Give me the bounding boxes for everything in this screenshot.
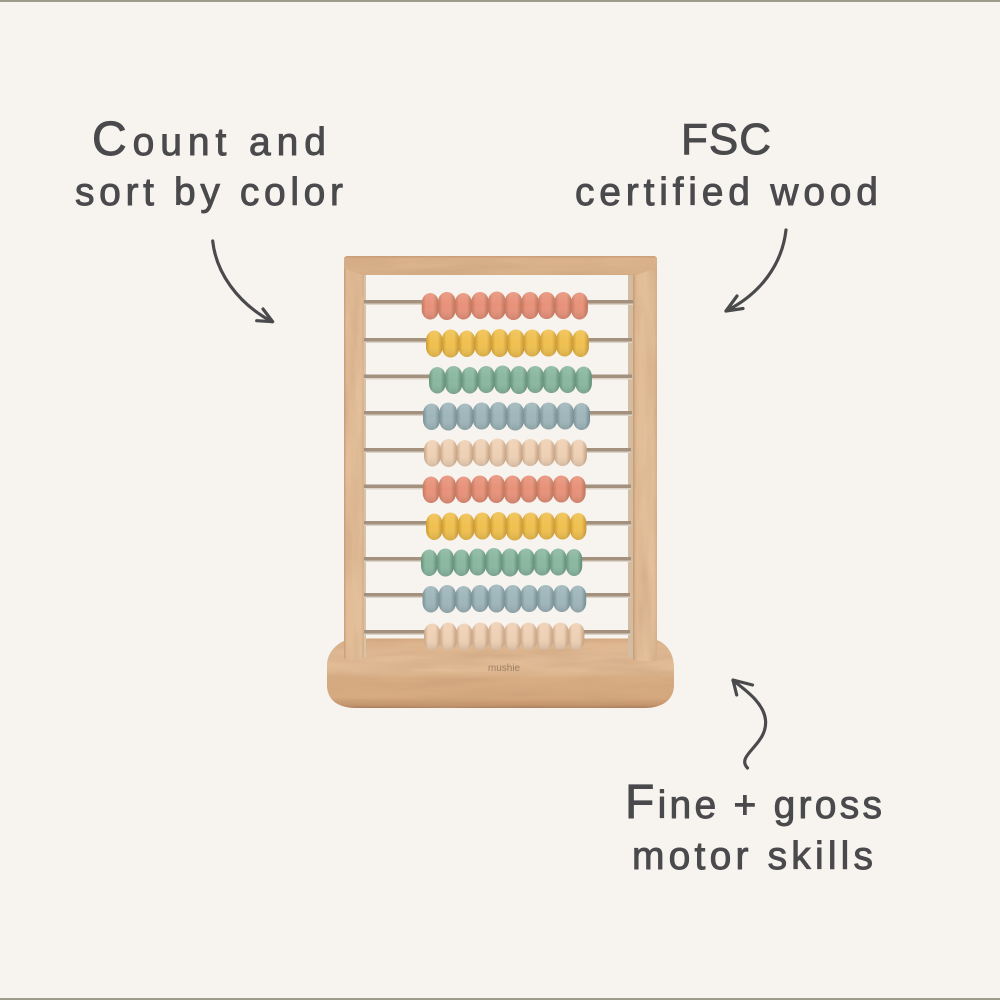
heading: FSC certified wood <box>575 115 878 214</box>
row 10 peach <box>424 622 584 650</box>
row 7 yellow <box>426 512 586 540</box>
row 4 blue <box>423 402 590 430</box>
heading: count and sort by color <box>75 113 343 214</box>
right post <box>633 256 657 661</box>
arrow: count and sort to abacus <box>213 241 273 322</box>
top bar <box>344 256 657 275</box>
top edge line <box>0 0 1000 2</box>
frame inner shadow strips <box>362 274 634 658</box>
row 2 yellow <box>426 329 589 358</box>
row 9 blue <box>422 584 586 613</box>
rods <box>364 300 633 635</box>
heading: fine and gross motor skills <box>625 776 882 878</box>
row 6 coral <box>423 475 586 504</box>
brand mark on base: mushie <box>488 663 521 674</box>
row 8 green <box>421 548 582 576</box>
wooden base <box>327 638 674 708</box>
bottom edge line <box>0 998 1000 1000</box>
heading: FSC certified wood: FSC <box>681 115 771 164</box>
bead rows <box>421 292 592 650</box>
abacus product <box>327 256 674 708</box>
row 5 peach <box>424 438 587 467</box>
arrow: FSC wood to abacus <box>726 230 786 311</box>
left post <box>344 256 364 660</box>
arrow: motor skills to abacus base <box>733 680 766 768</box>
heading: FSC certified wood: certified wood <box>575 171 878 214</box>
row 1 coral <box>422 292 588 320</box>
heading: fine and gross motor skills: Fine + gross <box>625 776 882 829</box>
heading: fine and gross motor skills: motor skills <box>632 835 873 878</box>
heading: count and sort by color: Count and <box>92 113 326 166</box>
row 3 green <box>429 366 592 394</box>
heading: count and sort by color: sort by color <box>75 171 343 214</box>
